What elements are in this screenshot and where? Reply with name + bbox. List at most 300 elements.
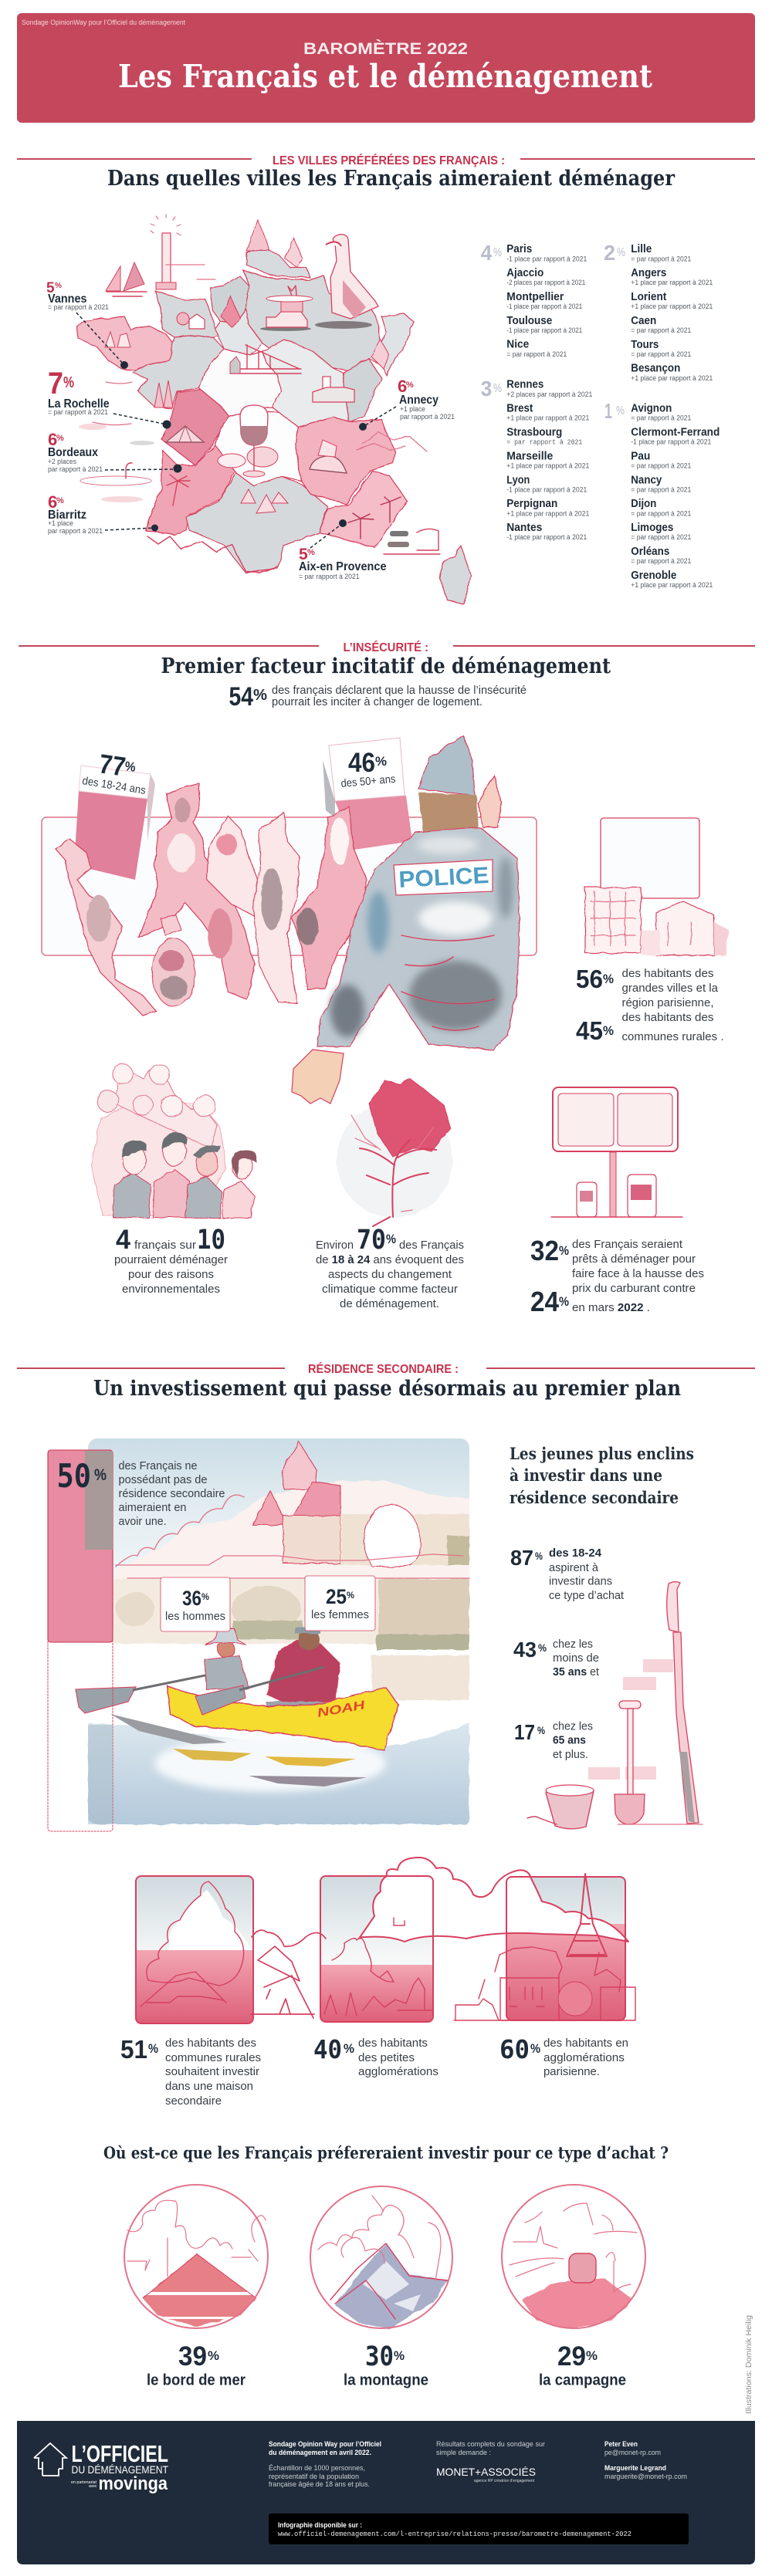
city list: 2%: +1 place par rapport à 2021 (631, 303, 713, 310)
callout: La Rochelle: = par rapport à 2021 (48, 408, 108, 416)
city list: 3%: Nantes (506, 522, 542, 534)
city list: 2%: = par rapport à 2021 (631, 255, 691, 262)
icon: bucket (527, 1785, 594, 1829)
city list: 4%: -2 places par rapport à 2021 (506, 279, 585, 286)
callout: La Rochelle: La Rochelle (48, 397, 110, 411)
stat: 39%: 39 (178, 2341, 207, 2371)
city list: 3%: Lyon (506, 474, 530, 486)
title: Les Français et le déménagement (118, 58, 652, 95)
city list: 4%: % (493, 246, 502, 259)
region: Picardie ouest (210, 276, 249, 324)
callout: La Rochelle: % (63, 374, 74, 391)
stat: 43%: chez les (553, 1638, 593, 1651)
icon: sailboat (106, 262, 147, 296)
stat: 4 sur 10: français sur (134, 1239, 196, 1252)
stat: 54%: pourrait les inciter à changer de logement. (272, 696, 482, 708)
stats: 56% and 45%: communes rurales . (622, 1031, 724, 1043)
city list: 1%: Nancy (631, 474, 662, 486)
water strokes (79, 265, 215, 502)
sign: 46%: des 50+ ans (340, 773, 396, 790)
stat: 39% (147, 2341, 245, 2389)
city list: 2%: 2 (604, 241, 615, 265)
wave reflections (110, 1714, 367, 1787)
callout: Annecy: Annecy (399, 394, 438, 407)
stat: 40% (313, 2034, 438, 2078)
callout: Bordeaux (48, 430, 103, 473)
stats: 56% and 45%: % (603, 1023, 614, 1038)
stats: 56% and 45%: 56 (576, 965, 603, 993)
stats: 32% and 24%: % (559, 1243, 569, 1258)
city list: 3%: Strasbourg (506, 426, 562, 438)
stats: 32% and 24% (530, 1235, 704, 1317)
section heading: insécurité: Premier facteur incitatif de déménagement (161, 654, 611, 678)
header banner (17, 13, 755, 123)
icon: house (34, 2443, 66, 2476)
stat: 54%: 54 (229, 682, 253, 712)
results and agency (436, 2440, 545, 2483)
survey note: Sondage OpinionWay pour l’Officiel du déménagement (22, 19, 185, 27)
panel sketches (141, 1881, 432, 2016)
subtitle: jeunes: à investir dans une (510, 1465, 662, 1485)
person: man (205, 1629, 249, 1690)
survey info: française âgée de 18 ans et plus. (269, 2480, 370, 2489)
stat: 87%: 87 (510, 1546, 533, 1570)
city list: 2%: Besançon (631, 363, 680, 375)
logo: DU DÉMÉNAGEMENT (71, 2463, 168, 2476)
callout: Vannes: Vannes (48, 292, 87, 306)
stat: 17%: chez les (553, 1721, 593, 1733)
box: 25% les femmes: % (347, 1590, 354, 1601)
logo: avec (89, 2484, 97, 2489)
icon: scythe (667, 1582, 699, 1824)
city list: 4%: -1 place par rapport à 2021 (506, 326, 582, 334)
bar: 50%: % (94, 1466, 107, 1484)
region: Corse (440, 546, 471, 604)
callout: Bordeaux: par rapport à 2021 (48, 465, 103, 473)
stat: 54%: % (253, 687, 267, 704)
callout: Vannes: % (55, 282, 62, 290)
icon: car with luggage (260, 286, 313, 331)
region: Auvergne (215, 409, 301, 486)
city list: 4%: -1 place par rapport à 2021 (506, 255, 587, 262)
callout: Annecy: % (406, 380, 414, 390)
stats: 32% and 24%: 24 (530, 1286, 559, 1317)
contacts: pe@monet-rp.com (604, 2449, 661, 2457)
stat: 51%: secondaire (165, 2095, 222, 2108)
callout: Aix-en Provence: 5 (299, 546, 308, 563)
text: 50% caption (119, 1460, 225, 1528)
text: 50% caption: des Français ne (119, 1460, 198, 1472)
city list: 1%: = par rapport à 2021 (631, 414, 691, 422)
box: 25% les femmes: 25 (326, 1585, 347, 1608)
icon: shovel (615, 1701, 645, 1824)
city list: 4%: Toulouse (506, 315, 552, 327)
city list: 1%: Avignon (631, 403, 672, 415)
city list: 4% (481, 241, 587, 358)
callout: Biarritz: 6 (48, 492, 57, 512)
section heading: villes: Dans quelles villes les Français aimeraient déménager (107, 167, 676, 191)
section heading: villes (17, 154, 755, 191)
callout: La Rochelle: 7 (48, 367, 63, 401)
fuel pump: large (628, 1175, 656, 1217)
results and agency: Résultats complets du sondage sur (436, 2440, 545, 2449)
callout: Aix-en Provence: % (307, 548, 315, 557)
logo: en partenariat (71, 2480, 97, 2485)
region: Pays de la Loire (133, 336, 224, 409)
icon: hill trees (241, 489, 288, 513)
text: 50% caption: aimeraient en (119, 1502, 187, 1514)
stat: 70%: de 18 à 24 ans évoquent des (316, 1254, 464, 1266)
icon: citroen car (310, 440, 347, 473)
map callouts (46, 280, 455, 580)
region: Limousin (162, 390, 229, 465)
callout: Aix-en Provence (299, 546, 387, 580)
wash strips (588, 1659, 673, 1780)
city list: 2%: Lille (631, 243, 652, 255)
stat: 87%: investir dans (549, 1576, 612, 1588)
stat: 4 sur 10: pour des raisons (128, 1269, 214, 1281)
box: 36% les hommes (161, 1577, 230, 1631)
police badge: POLICE (398, 863, 489, 893)
city list: 3%: Rennes (506, 379, 543, 391)
stat: 40%: des petites (358, 2052, 415, 2064)
stat: 87%: des 18-24 (549, 1547, 601, 1560)
city list: 1%: = par rapport à 2021 (631, 461, 691, 469)
region: Normandie (155, 291, 224, 337)
contacts: marguerite@monet-rp.com (604, 2473, 687, 2481)
stat: 29%: 29 (557, 2341, 586, 2371)
contacts (604, 2440, 687, 2481)
stats: 32% and 24%: % (559, 1294, 569, 1309)
icon: trees north (221, 220, 389, 369)
stats: 56% and 45% (576, 965, 724, 1045)
city list: 2%: Angers (631, 267, 666, 279)
stat: 87%: ce type d’achat (549, 1590, 624, 1602)
region: Centre nord (243, 270, 382, 370)
stat: 29%: % (586, 2348, 598, 2363)
section heading: résidence secondaire: Un investissement qui passe désormais au premier plan (93, 1377, 681, 1401)
city list: 1%: = par rapport à 2021 (631, 533, 691, 541)
survey info: Échantillon de 1000 personnes, (269, 2464, 365, 2473)
section heading: villes: LES VILLES PRÉFÉRÉES DES FRANÇAIS : (273, 154, 505, 167)
stat: 30% (344, 2341, 428, 2389)
city list: 3%: +2 places par rapport à 2021 (506, 390, 592, 398)
stat: 60%: 60 (499, 2034, 530, 2064)
section heading: insécurité: L’INSÉCURITÉ : (343, 641, 428, 654)
panel: agglomération parisienne fill (506, 1877, 625, 2020)
city list: 3%: -1 place par rapport à 2021 (506, 533, 587, 541)
city list: 3%: % (493, 382, 502, 395)
section heading: résidence secondaire: RÉSIDENCE SECONDAIRE : (308, 1363, 459, 1376)
survey info: du déménagement en avril 2022. (269, 2449, 371, 2457)
icon: house (177, 313, 205, 329)
city list: 3%: +1 place par rapport à 2021 (506, 509, 589, 517)
stat: 29% (539, 2341, 626, 2389)
contacts: Peter Even (604, 2440, 638, 2449)
region: Franche-Comté (343, 359, 381, 422)
city list: 1%: = par rapport à 2021 (631, 557, 691, 565)
illustration: crowd (91, 1064, 257, 1218)
bar: 50%: 50 (57, 1457, 91, 1495)
stat: 87%: aspirent à (549, 1562, 599, 1574)
callout: La Rochelle (48, 367, 110, 416)
stats: 32% and 24%: en mars 2022 . (572, 1302, 650, 1314)
city list: 3%: +1 place par rapport à 2021 (506, 414, 589, 422)
city list: 1%: Grenoble (631, 570, 676, 582)
city list: 2%: Caen (631, 315, 656, 327)
callout: Biarritz: +1 place (48, 519, 73, 527)
stat: 70%: des Français (399, 1239, 464, 1252)
stat: 40%: agglomérations (358, 2066, 438, 2078)
stat: 70% (316, 1225, 464, 1310)
fuel pump: small (577, 1182, 597, 1217)
city list: 1%: = par rapport à 2021 (631, 485, 691, 493)
stat: 70%: Environ (316, 1239, 354, 1252)
person: woman (266, 1627, 340, 1711)
sign: 46%: % (375, 754, 387, 769)
city list: 4%: 4 (481, 241, 493, 265)
city list: 2%: = par rapport à 2021 (631, 350, 691, 358)
stat: 51%: communes rurales (165, 2052, 261, 2064)
icon: goose (315, 235, 378, 329)
callout: Bordeaux: +2 places (48, 458, 76, 465)
icon: vendee trees (154, 380, 173, 407)
section heading: insécurité (19, 641, 755, 678)
subtitle: jeunes: Les jeunes plus enclins (510, 1444, 694, 1463)
illustration: canoe painting (76, 1438, 469, 1824)
callout: Vannes: 5 (46, 280, 55, 296)
town outlines (116, 1495, 469, 1578)
stats: 32% and 24%: prêts à déménager pour (572, 1253, 696, 1266)
city list: 3%: Perpignan (506, 498, 557, 510)
question heading: Où est-ce que les Français préfereraient investir pour ce type d’achat ? (103, 2143, 669, 2162)
city list: 4%: -1 place par rapport à 2021 (506, 303, 582, 310)
city list: 4%: Nice (506, 339, 529, 351)
stat: 43%: % (538, 1641, 547, 1654)
canoe: NOAH (317, 1699, 366, 1720)
logo: L’OFFICIEL (71, 2440, 168, 2467)
stat: 30%: 30 (365, 2341, 394, 2372)
city list: 1% (604, 399, 720, 589)
circle: campagne (502, 2185, 645, 2329)
stat: 70%: 70 (357, 1225, 386, 1256)
stat: 40%: 40 (313, 2034, 342, 2064)
map dots (120, 361, 367, 531)
survey info: Sondage Opinion Way pour l’Officiel (269, 2440, 381, 2449)
stat: 4 sur 10: 4 (116, 1225, 131, 1255)
circle: bord de mer (124, 2185, 268, 2328)
city list: 3%: -1 place par rapport à 2021 (506, 485, 587, 493)
illustration: tree (337, 1078, 452, 1226)
city list: 1%: Pau (631, 450, 650, 462)
region: Hauts-de-France (246, 248, 310, 278)
logo (34, 2440, 168, 2494)
stat: 17% (514, 1720, 593, 1761)
url box: www.officiel-demenagement.com/l-entreprise/relations-presse/barometre-demenagement-2022 (278, 2530, 631, 2538)
bar: 50% (48, 1450, 113, 1831)
callout: Annecy (398, 377, 455, 421)
stat: 4 sur 10: environnementales (122, 1283, 220, 1296)
footer (17, 2421, 755, 2564)
front bodies (113, 1173, 151, 1218)
stat: 54%: des français déclarent que la hausse de l’insécurité (272, 685, 527, 697)
city list: 1%: Orléans (631, 546, 669, 558)
panel: petites agglomérations fill (320, 1876, 433, 2022)
front heads (123, 1145, 146, 1175)
icon: bridge (230, 345, 301, 374)
illustration: police scene (42, 735, 537, 1104)
icon: lighthouse (151, 215, 181, 289)
france map (76, 215, 471, 604)
stat: 70%: % (386, 1232, 396, 1246)
city list: 1%: % (616, 404, 625, 418)
town (113, 1442, 469, 1700)
city list: 2%: +1 place par rapport à 2021 (631, 374, 713, 382)
city list: 3% (481, 377, 592, 541)
stats: 56% and 45%: des habitants des (622, 968, 713, 980)
logo: movinga (99, 2473, 168, 2494)
city list: 4%: = par rapport à 2021 (506, 350, 567, 358)
callout: Annecy: 6 (398, 377, 407, 396)
survey info: représentatif de la population (269, 2473, 359, 2481)
illustration: buildings (585, 818, 729, 955)
region: Alsace (378, 314, 414, 376)
sticks paddles right (195, 1667, 324, 1715)
hand (292, 1050, 344, 1104)
clouds (359, 1858, 628, 1942)
uniform shading (330, 836, 513, 1037)
text: 50% caption: avoir une. (119, 1516, 167, 1528)
city list: 1%: = par rapport à 2021 (631, 509, 691, 517)
stat: 39%: le bord de mer (147, 2372, 245, 2389)
callout: Annecy: +1 place (400, 405, 425, 413)
sign: 77%: des 18-24 ans (81, 775, 147, 797)
icon: rocks and boat (384, 529, 440, 554)
paris tower and buildings (454, 1874, 635, 2020)
stat: 51%: % (148, 2041, 158, 2056)
stat: 17%: 65 ans (553, 1735, 586, 1747)
city list: 1%: 1 (604, 399, 612, 423)
city list: 2%: % (617, 246, 625, 259)
text: 50% caption: possédant pas de (119, 1474, 207, 1486)
icon: castle (313, 377, 354, 402)
region: Ile-de-France (215, 309, 262, 355)
stat: 51%: souhaitent investir (165, 2066, 259, 2078)
stats: 32% and 24%: prix du carburant contre (572, 1283, 696, 1295)
callout: Bordeaux: 6 (48, 430, 57, 449)
sign: 77%: 77 (97, 749, 127, 783)
city list: 2% (604, 241, 713, 382)
panels: three agglomerations (136, 1858, 635, 2023)
city list: 1%: Dijon (631, 498, 656, 510)
circle: montagne (310, 2186, 452, 2329)
callout: Biarritz: par rapport à 2021 (48, 527, 103, 535)
callout: Vannes (46, 280, 109, 311)
stat: 87%: % (535, 1550, 543, 1562)
city list: 2%: = par rapport à 2021 (631, 326, 691, 334)
city list: 3%: +1 place par rapport à 2021 (506, 461, 589, 469)
stat: 30%: % (394, 2348, 405, 2363)
stat: 51% (120, 2035, 261, 2108)
mountain scene (251, 1930, 326, 2018)
city list: 3%: Brest (506, 403, 533, 415)
stat: 51%: dans une maison (165, 2081, 253, 2093)
city list: 3%: 3 (481, 377, 492, 401)
stats: 32% and 24%: 32 (530, 1235, 559, 1266)
callout: Bordeaux: Bordeaux (48, 446, 98, 459)
sky (88, 1438, 469, 1639)
results and agency: simple demande : (436, 2449, 491, 2457)
url box (269, 2513, 689, 2544)
city list: 1%: Clermont-Ferrand (631, 426, 720, 438)
stat: 70%: aspects du changement (328, 1269, 452, 1281)
box: 36% les hommes: 36 (182, 1587, 201, 1610)
stat: 39%: % (208, 2348, 219, 2363)
canoe (167, 1685, 398, 1750)
icon: sea monster (80, 463, 151, 485)
stat: 60%: % (530, 2041, 540, 2056)
stat: 40%: % (344, 2041, 354, 2056)
text: 50% caption: résidence secondaire (119, 1488, 225, 1500)
callout: Biarritz: Biarritz (48, 509, 86, 522)
stat: 60% (499, 2034, 628, 2078)
callout: Vannes: = par rapport à 2021 (48, 303, 109, 311)
contacts: Marguerite Legrand (604, 2464, 666, 2473)
region: Occitanie (186, 473, 328, 573)
city list: 1%: Limoges (631, 522, 673, 534)
callout: Aix-en Provence: = par rapport à 2021 (299, 573, 360, 580)
subtitle: jeunes (510, 1444, 694, 1507)
city list: 4%: Ajaccio (506, 267, 543, 279)
survey info (269, 2440, 381, 2489)
url box: Infographie disponible sur : (278, 2521, 362, 2530)
city list: 2%: Tours (631, 339, 659, 351)
subtitle: jeunes: résidence secondaire (510, 1488, 679, 1507)
pyrenees coast (147, 536, 278, 573)
sticks paddles left (76, 1668, 239, 1713)
box: 25% les femmes (305, 1576, 375, 1631)
stats: 56% and 45%: des habitants des (622, 1012, 713, 1024)
box: 36% les hommes: les hommes (165, 1611, 225, 1623)
results and agency: MONET+ASSOCIÉS (436, 2466, 536, 2478)
city list: 2%: Lorient (631, 291, 666, 303)
stat: 60%: des habitants en (543, 2037, 628, 2050)
stat: 43%: 35 ans et (553, 1666, 599, 1678)
stat: 40%: des habitants (358, 2037, 428, 2050)
icon: menhirs (105, 332, 130, 347)
illustration: gas station (551, 1087, 682, 1217)
region: Rhône-Alpes (296, 417, 396, 504)
sign: 77% (74, 749, 155, 880)
stats: 56% and 45%: 45 (576, 1016, 603, 1045)
stat: 87% (510, 1546, 624, 1602)
stat: 51%: 51 (120, 2035, 147, 2064)
region: PACA (319, 471, 408, 548)
stat: 70%: climatique comme facteur (322, 1283, 458, 1296)
stat: 4 sur 10: pourraient déménager (114, 1254, 228, 1266)
policeman (317, 735, 520, 1050)
panel: communes rurales fill (136, 1876, 253, 2023)
stat: 70%: de déménagement. (340, 1298, 439, 1310)
region: Centre (199, 349, 281, 417)
callout: Biarritz: % (56, 496, 64, 505)
stats: 56% and 45%: % (603, 972, 614, 986)
stat: 43%: 43 (513, 1638, 537, 1662)
results and agency: agence RP créatrice d’engagement (474, 2479, 535, 2483)
stat: 17%: % (537, 1724, 545, 1736)
icon: wine glass and grapes (218, 405, 278, 477)
callout: Bordeaux: % (56, 434, 64, 443)
